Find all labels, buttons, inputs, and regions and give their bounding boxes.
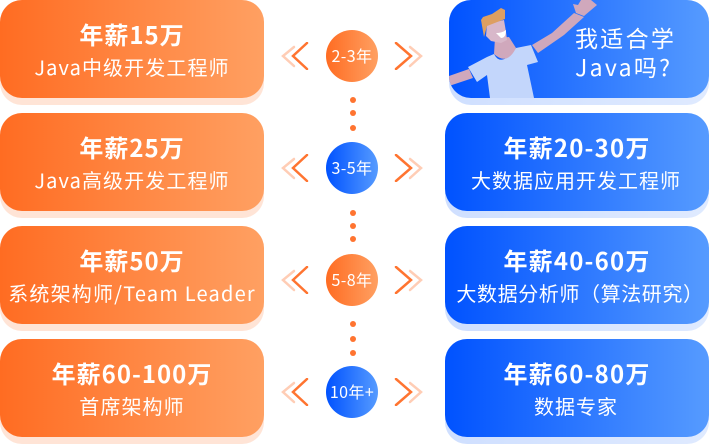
card: Java senior engineer [0, 113, 264, 218]
badge: 5-8 years [326, 254, 378, 306]
badge: 10+ years: 10年+ [330, 379, 374, 403]
card: Java mid-level engineer [0, 0, 264, 105]
card: big data application engineer: 大数据应用开发工程师 [471, 165, 681, 194]
card: Java mid-level engineer: 年薪15万 [79, 16, 185, 51]
connector dots: 2 to 3 [350, 210, 356, 242]
card: big data analyst: 年薪40-60万 [503, 242, 651, 277]
card: system architect: 系统架构师/Team Leader [8, 278, 256, 307]
card: big data analyst: 大数据分析师（算法研究） [456, 278, 704, 307]
connector dots: 1 to 2 [350, 97, 356, 131]
illustration: waving man [449, 0, 597, 98]
card: data expert [445, 339, 709, 444]
card: chief architect [0, 339, 264, 444]
badge: 2-3 years: 2-3年 [332, 43, 372, 67]
card: big data application engineer: 年薪20-30万 [503, 129, 651, 164]
banner: am I suited to learn Java [449, 0, 709, 105]
banner heading: 我适合学 [575, 20, 676, 54]
arrows: row 3 [281, 266, 423, 294]
badge: 5-8 years: 5-8年 [332, 267, 372, 291]
badge: 3-5 years [326, 142, 378, 194]
card: data expert: 年薪60-80万 [503, 355, 651, 390]
badge: 2-3 years [326, 30, 378, 82]
card: chief architect: 首席架构师 [79, 391, 185, 420]
badge: 3-5 years: 3-5年 [332, 155, 372, 179]
card: Java senior engineer: 年薪25万 [79, 129, 185, 164]
arrows: row 2 [281, 154, 423, 182]
card: system architect [0, 226, 264, 331]
card: system architect: 年薪50万 [79, 242, 185, 277]
card: chief architect: 年薪60-100万 [52, 355, 212, 390]
card: big data analyst [445, 226, 709, 331]
badge: 10+ years [326, 366, 378, 418]
card: data expert: 数据专家 [534, 391, 618, 420]
card: Java senior engineer: Java高级开发工程师 [34, 165, 230, 194]
card: big data application engineer [445, 113, 709, 218]
card: Java mid-level engineer: Java中级开发工程师 [34, 52, 230, 81]
connector dots: 3 to 4 [350, 321, 356, 356]
arrows: row 1 [281, 42, 423, 70]
arrows: row 4 [281, 378, 423, 406]
banner: am I suited to learn Java: Java吗? [575, 49, 672, 83]
